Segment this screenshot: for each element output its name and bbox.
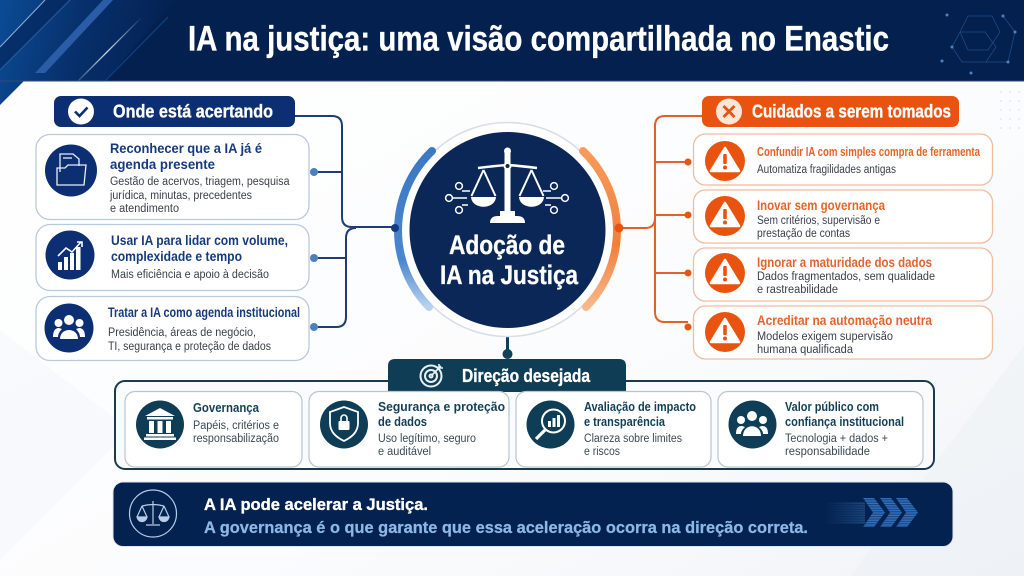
- panel: Tratar a IA como agenda institucional: Tratar a IA como agenda institucional: [108, 304, 300, 320]
- panel: Acreditar na automação neutra: humana qualificada: [757, 344, 854, 356]
- panel: Usar IA para lidar com volume: [36, 224, 309, 290]
- icon: warning: [705, 196, 745, 236]
- panel: Usar IA para lidar com volume: complexidade e tempo: [111, 248, 242, 264]
- panel: Ignorar a maturidade dos dados: Ignorar a maturidade dos dados: [757, 255, 932, 270]
- panel: Usar IA para lidar com volume: Mais eficiência e apoio à decisão: [111, 269, 269, 281]
- icon: target: [420, 364, 443, 386]
- panel: Inovar sem governança: prestação de contas: [757, 228, 850, 240]
- panel: Inovar sem governança: Sem critérios, supervisão e: [757, 215, 880, 227]
- card: Valor público com confiança institucional: responsabilidade: [785, 446, 870, 458]
- panel: Confundir IA: [694, 134, 992, 185]
- panel: Reconhecer que a IA já é agenda presente: [36, 134, 309, 220]
- heading: Cuidados a serem tomados: [702, 96, 959, 127]
- panel: Acreditar na automação neutra: Acreditar na automação neutra: [757, 313, 932, 328]
- panel: Ignorar a maturidade dos dados: [694, 248, 992, 301]
- callout banner: A IA pode acelerar a Justiça.: [204, 496, 428, 514]
- card: Avaliação de impacto e transparência: [516, 392, 711, 467]
- panel: Usar IA para lidar com volume: Usar IA para lidar com volume,: [111, 232, 288, 248]
- central hub: Adoção de IA na Justiça: IA na Justiça: [440, 260, 579, 290]
- heading: Cuidados a serem tomados: Cuidados a serem tomados: [752, 102, 951, 122]
- heading: Onde está acertando: [54, 96, 295, 127]
- card: Valor público com confiança institucional: Valor público com: [785, 400, 879, 414]
- decorative hexagon network: [940, 14, 1016, 74]
- panel: Tratar a IA como agenda institucional: [36, 296, 309, 360]
- right connector node: [614, 224, 624, 232]
- icon: scales in circle: [130, 490, 176, 537]
- card: Valor público com confiança institucional: Tecnologia + dados +: [785, 433, 888, 445]
- card: Governança: [125, 392, 302, 467]
- card: Avaliação de impacto e transparência: Clareza sobre limites: [584, 433, 682, 445]
- icon: warning: [705, 253, 745, 293]
- panel: Reconhecer que a IA já é agenda presente: jurídica, minutas, precedentes: [109, 190, 252, 202]
- icon: people: [44, 304, 94, 352]
- card: Governança: responsabilização: [193, 433, 279, 445]
- icon: people: [728, 400, 776, 448]
- card: Segurança e proteção de dados: Segurança e proteção: [378, 400, 505, 414]
- header band: [0, 0, 1024, 105]
- icon: chevrons: [825, 498, 920, 527]
- icon: warning: [705, 312, 745, 352]
- orange arc: [583, 151, 617, 307]
- card: Avaliação de impacto e transparência: e riscos: [584, 446, 620, 458]
- panel: Ignorar a maturidade dos dados: Dados fragmentados, sem qualidade: [757, 271, 935, 283]
- panel: Acreditar na automação neutra: Modelos exigem supervisão: [757, 331, 893, 343]
- panel: Tratar a IA como agenda institucional: Presidência, áreas de negócio,: [108, 327, 256, 339]
- blue arc: [398, 151, 432, 307]
- card: Valor público com confiança institucional: confiança institucional: [785, 415, 904, 429]
- central hub: Adoção de IA na Justiça: [391, 122, 624, 336]
- panel: Ignorar a maturidade dos dados: e rastreabilidade: [757, 284, 838, 296]
- panel: Reconhecer que a IA já é agenda presente: Gestão de acervos, triagem, pesquisa: [110, 176, 290, 188]
- panel: Inovar sem governança: [694, 190, 992, 243]
- title: IA na justiça: uma visão compartilhada no Enastic: [188, 20, 889, 58]
- callout banner: [113, 482, 953, 546]
- heading: Onde está acertando: Onde está acertando: [113, 102, 273, 122]
- central hub: Adoção de IA na Justiça: Adoção de: [449, 230, 565, 260]
- heading tab: Direção desejada: Direção desejada: [462, 366, 591, 386]
- connector: center to direction: [502, 326, 512, 359]
- panel: Direção desejada: [115, 359, 934, 469]
- icon: growth chart: [46, 230, 94, 280]
- panel: Reconhecer que a IA já é agenda presente: e atendimento: [110, 203, 179, 215]
- card: Avaliação de impacto e transparência: Avaliação de impacto: [584, 400, 696, 414]
- left connector node: [391, 224, 399, 232]
- panel: Reconhecer que a IA já é agenda presente: Reconhecer que a IA já é: [110, 140, 262, 156]
- icon: magnifier with chart: [526, 400, 574, 448]
- icon: folder: [45, 144, 97, 196]
- card: Segurança e proteção de dados: e auditável: [378, 446, 431, 458]
- connectors: left: [295, 116, 395, 331]
- heading tab: Direção desejada: [388, 359, 626, 392]
- panel: Acreditar na automação neutra: [694, 306, 992, 359]
- card: Segurança e proteção de dados: [309, 392, 509, 467]
- icon: check: [68, 98, 94, 124]
- card: Avaliação de impacto e transparência: e transparência: [584, 415, 666, 429]
- icon: institution: [136, 400, 184, 448]
- card: Segurança e proteção de dados: Uso legítimo, seguro: [378, 433, 476, 445]
- callout banner: A governança é o que garante que essa aceleração ocorra na direção correta.: [204, 519, 808, 537]
- card: Valor público com confiança institucional: [718, 392, 923, 467]
- icon: shield: [320, 400, 368, 448]
- card: Governança: Governança: [193, 401, 260, 415]
- panel: Inovar sem governança: Inovar sem governança: [757, 198, 885, 213]
- connectors: right: [620, 116, 702, 330]
- panel: Reconhecer que a IA já é agenda presente: agenda presente: [110, 156, 215, 172]
- icon: x: [716, 98, 742, 124]
- icon: warning: [705, 141, 745, 181]
- panel: Tratar a IA como agenda institucional: TI, segurança e proteção de dados: [108, 341, 271, 353]
- panel: Confundir IA: Automatiza fragilidades antigas: [757, 164, 896, 176]
- card: Segurança e proteção de dados: de dados: [378, 415, 427, 429]
- icon: scales of justice: [446, 148, 568, 223]
- card: Governança: Papéis, critérios e: [193, 420, 279, 432]
